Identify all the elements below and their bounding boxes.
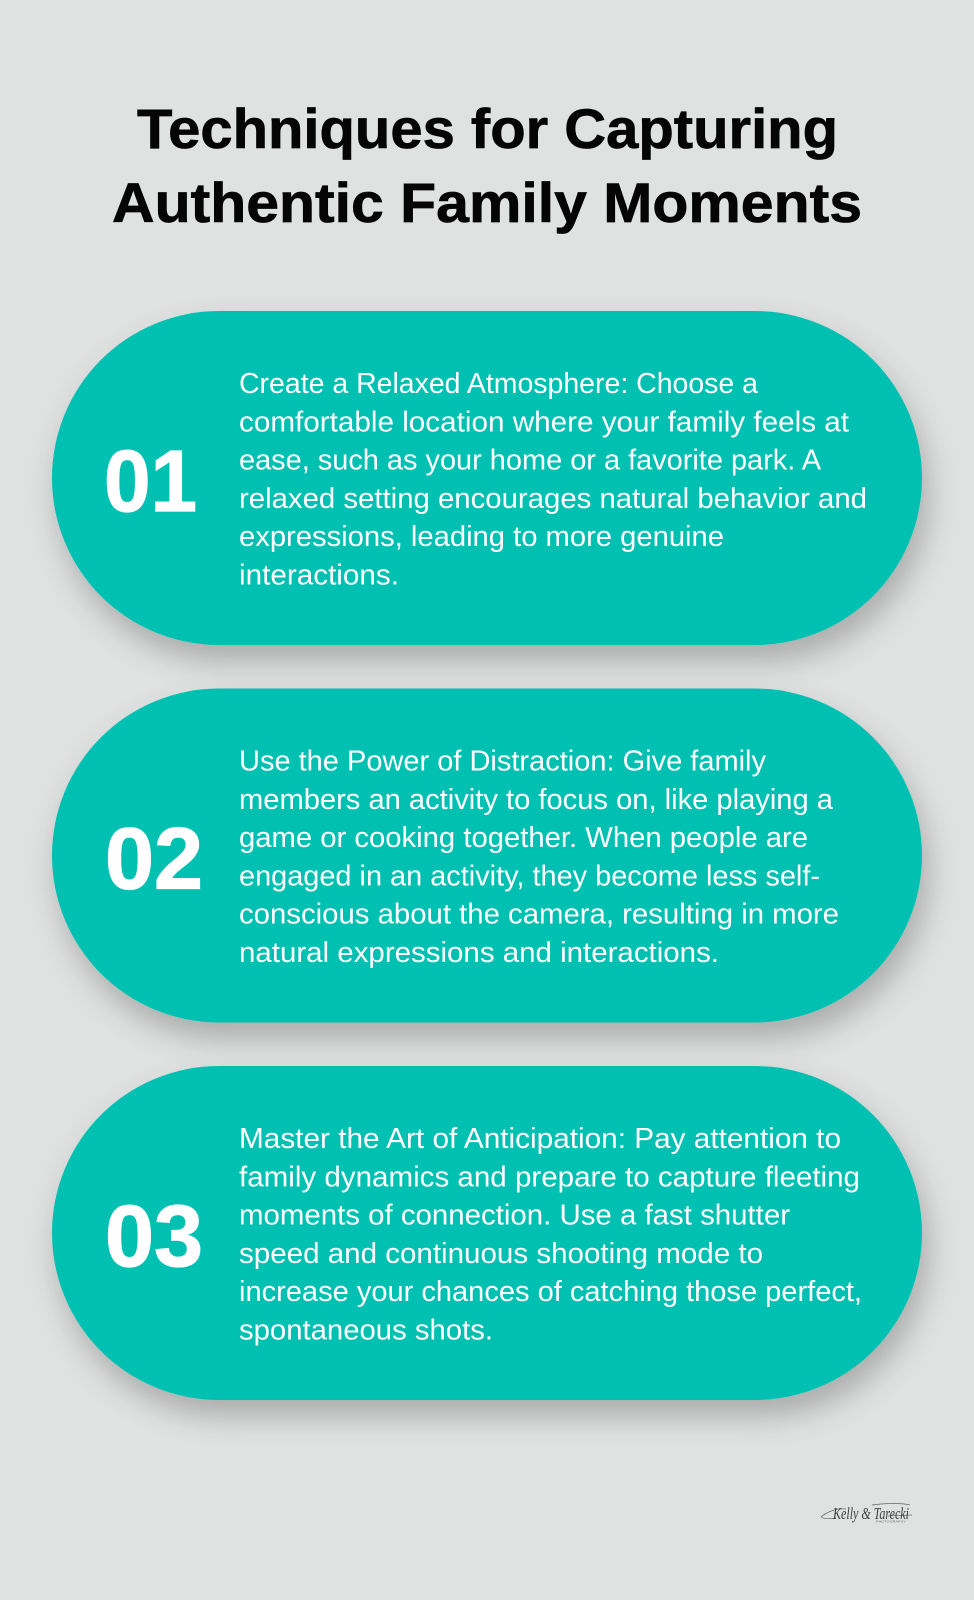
panel: step 01: [52, 311, 922, 645]
panel: step 03: [52, 1066, 922, 1400]
text block 01: Create a Relaxed Atmosphere: Choose a: [239, 368, 758, 400]
number 01: 01: [104, 433, 197, 530]
text block 01: interactions.: [239, 560, 399, 592]
text block 02: conscious about the camera, resulting in more: [239, 899, 839, 931]
title: [112, 98, 862, 234]
title: Techniques for Capturing: [137, 98, 838, 160]
text block 02: game or cooking together. When people are: [239, 822, 808, 854]
text block 03: increase your chances of catching those perfect,: [239, 1276, 862, 1308]
text block 03: moments of connection. Use a fast shutter: [239, 1200, 790, 1232]
text block 01: [239, 368, 867, 592]
logo: signature: Kelly & Tarecki: [832, 1504, 909, 1523]
text block 03: [239, 1123, 862, 1346]
text block 02: [239, 746, 839, 969]
text block 01: ease, such as your home or a favorite park. A: [239, 445, 822, 477]
pill background 03: [52, 1066, 922, 1400]
text block 03: speed and continuous shooting mode to: [239, 1238, 763, 1270]
text block 02: engaged in an activity, they become less self-: [239, 860, 820, 892]
text block 01: expressions, leading to more genuine: [239, 521, 724, 553]
title: Authentic Family Moments: [112, 172, 862, 234]
text block 03: family dynamics and prepare to capture fleeting: [239, 1161, 860, 1193]
text block 01: relaxed setting encourages natural behavior and: [239, 483, 867, 515]
text block 02: Use the Power of Distraction: Give family: [239, 746, 767, 778]
number 02: 02: [105, 810, 203, 908]
panel: step 02: [52, 688, 922, 1022]
text block 02: members an activity to focus on, like playing a: [239, 784, 833, 816]
logo: signature: PHOTOGRAPHY: [876, 1520, 906, 1524]
pill background 01: [52, 311, 922, 645]
text block 02: natural expressions and interactions.: [239, 937, 719, 969]
pill background 02: [52, 688, 922, 1022]
logo: signature: [821, 1504, 912, 1524]
text block 01: comfortable location where your family feels at: [239, 406, 849, 438]
text block 03: Master the Art of Anticipation: Pay attention to: [239, 1123, 841, 1155]
text block 03: spontaneous shots.: [239, 1314, 493, 1346]
number 03: 03: [105, 1188, 203, 1285]
